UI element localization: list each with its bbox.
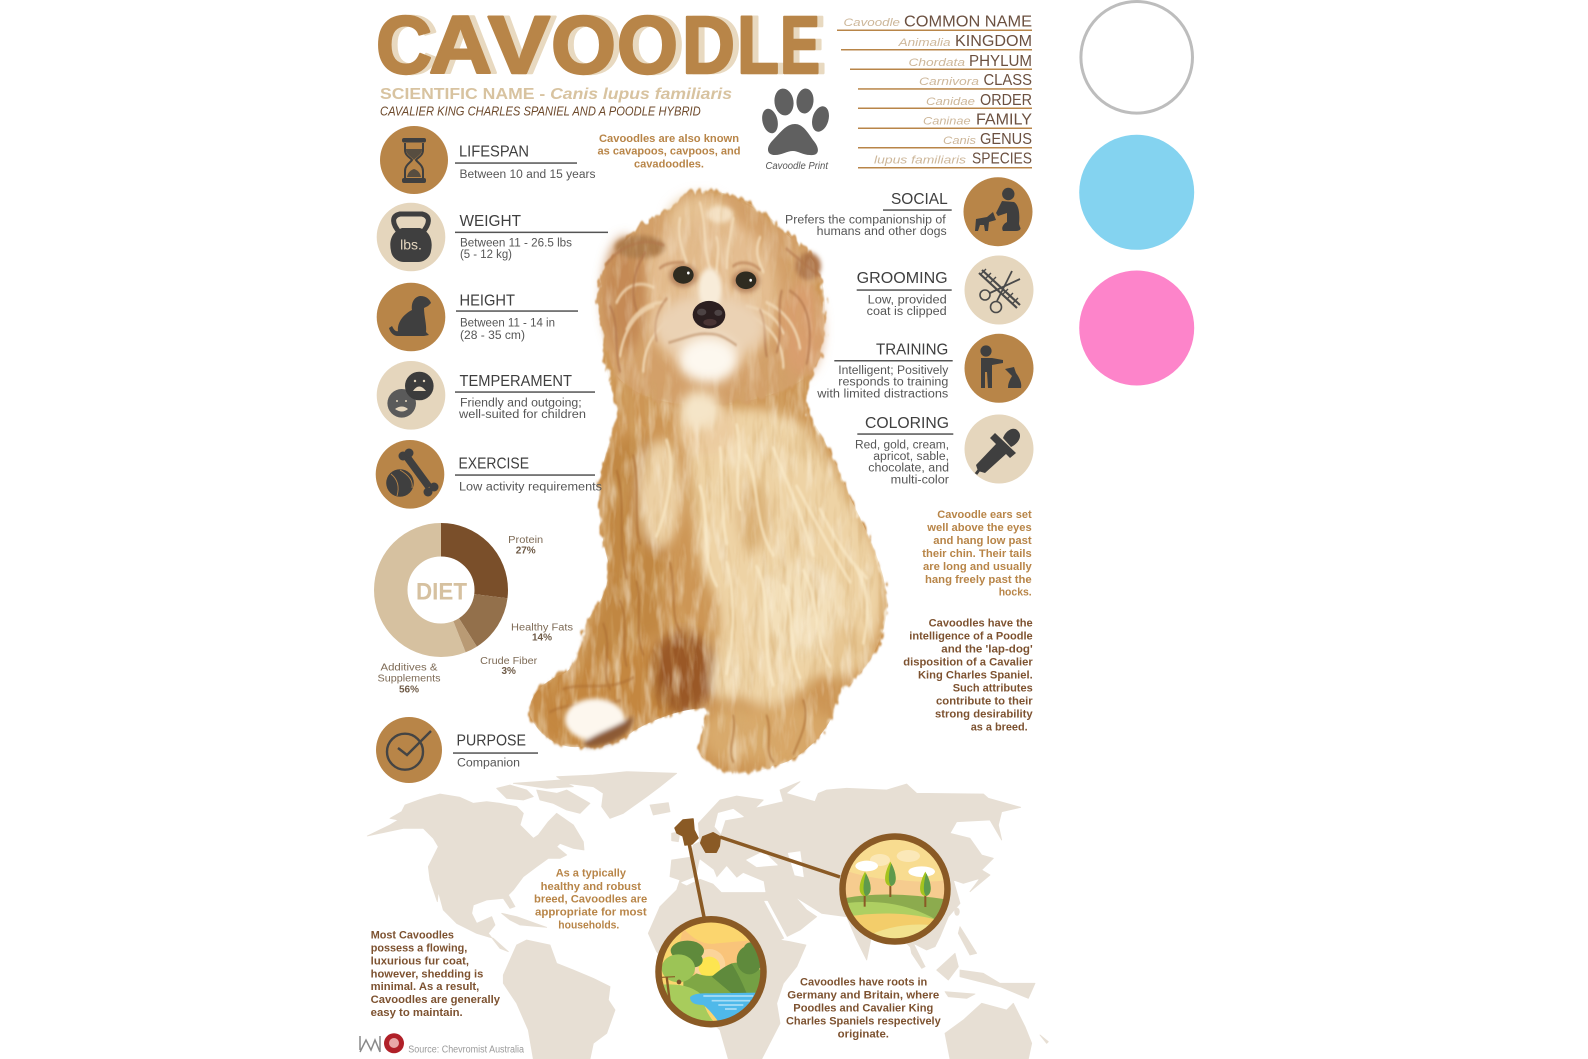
text block: roots: Germany and Britain, where (787, 990, 939, 1002)
text block: healthy breed: healthy and robust (541, 881, 641, 893)
diet labels: 27% (516, 546, 536, 557)
text block: healthy breed: breed, Cavoodles are (534, 894, 647, 906)
panel: coloring: COLORING (865, 415, 949, 432)
text block: roots: Cavoodles have roots in (800, 977, 928, 989)
logo: red seal (384, 1033, 404, 1053)
scientific name: SCIENTIFIC NAME - Canis lupus familiaris (380, 86, 732, 103)
title (376, 0, 826, 91)
text block: roots: Poodles and Cavalier King (793, 1003, 933, 1015)
head fur strokes (617, 203, 800, 371)
text block: ears and tails: and hang low past (933, 535, 1032, 547)
panel: exercise: Low activity requirements (459, 482, 602, 494)
panel: temperament: TEMPERAMENT (460, 373, 572, 390)
marker: Germany (701, 833, 720, 852)
panel: weight: Between 11 - 26.5 lbs (460, 238, 572, 250)
panel: grooming: Low, provided (868, 294, 947, 306)
text block: intelligence (903, 618, 1034, 733)
icon: eyedropper (964, 414, 1034, 484)
eyes (669, 264, 697, 287)
diet labels: Healthy Fats (511, 623, 573, 634)
icon: trainer and dog (964, 334, 1034, 403)
title main: C (376, 0, 432, 91)
text block: healthy breed: appropriate for most (535, 907, 647, 919)
title shadow: C (382, 0, 438, 91)
icon: faces (377, 361, 445, 430)
text block: coat: Cavoodles are generally (371, 994, 501, 1006)
panel: coloring: Red, gold, cream, (855, 439, 949, 451)
panel: purpose: PURPOSE (456, 732, 526, 750)
arrow: Germany to landscape (720, 837, 840, 877)
taxonomy list: KINGDOM (955, 33, 1032, 50)
text block: ears and tails (922, 509, 1033, 599)
tail tip (565, 699, 633, 747)
title shadow: A (435, 0, 498, 91)
landscape: lake circle (657, 917, 767, 1027)
text block: roots (786, 977, 942, 1041)
panel: grooming (857, 256, 1034, 324)
callout: also known as: as cavapoos, cavpoos, and (598, 146, 740, 158)
title shadow: V (494, 0, 556, 91)
diet labels: 14% (532, 633, 552, 644)
text block: healthy breed (534, 868, 647, 931)
panel: training: with limited distractions (816, 388, 949, 400)
map: Eurasia, Africa and Oceania (648, 782, 1048, 1059)
text block: ears and tails: their chin. Their tails (922, 548, 1032, 560)
text block: coat: luxurious fur coat, (371, 955, 469, 967)
diet labels: Crude Fiber (480, 656, 538, 667)
taxonomy list: Cavoodle (844, 17, 900, 29)
text block: ears and tails: are long and usually (923, 561, 1033, 573)
map: Americas and Greenland (367, 772, 680, 1059)
taxonomy list: SPECIES (972, 150, 1032, 168)
taxonomy list: Animalia (897, 37, 951, 49)
fur strokes (657, 425, 867, 685)
icon: hourglass (380, 126, 448, 194)
panel: temperament (377, 361, 595, 430)
panel: height: Between 11 - 14 in (460, 318, 555, 330)
source credit: Source: Chevromist Australia (408, 1045, 524, 1056)
taxonomy list: Canidae (926, 96, 975, 108)
taxonomy list: FAMILY (976, 112, 1032, 128)
taxonomy list: GENUS (980, 131, 1032, 148)
callout: also known as (598, 133, 740, 170)
text block: intelligence: Such attributes (953, 683, 1033, 695)
panel: lifespan: LIFESPAN (459, 144, 529, 160)
panel: exercise: EXERCISE (458, 456, 529, 472)
title shadow: E (786, 0, 826, 91)
callout: also known as: Cavoodles are also known (599, 133, 739, 145)
panel: exercise (376, 440, 602, 509)
text block: ears and tails: hang freely past the (925, 574, 1032, 586)
taxonomy list (837, 14, 1032, 168)
swatch circles (1079, 2, 1194, 386)
taxonomy list: Canis (943, 135, 977, 147)
icon: comb and scissors (964, 256, 1034, 324)
icon: paw print (760, 87, 832, 155)
panel: weight: WEIGHT (460, 213, 522, 230)
paw caption: Cavoodle Print (766, 161, 829, 172)
text block: coat: easy to maintain. (371, 1007, 463, 1019)
taxonomy list: Chordata (908, 57, 965, 69)
arrow: Britain to landscape (689, 843, 704, 917)
head texture (605, 195, 825, 404)
diet labels: Protein (508, 535, 543, 546)
taxonomy list: Carnivora (919, 76, 979, 88)
world map (367, 772, 1048, 1059)
head (587, 180, 840, 429)
diet labels: 3% (501, 666, 516, 677)
title main: V (488, 0, 550, 91)
panel: training (816, 334, 1034, 403)
taxonomy list: ORDER (980, 92, 1032, 109)
icon: kettlebell: lbs. (400, 236, 422, 252)
panel: social (785, 177, 1032, 246)
icon: person with dog (964, 177, 1032, 246)
title main: O (617, 0, 678, 91)
marker: Britain (675, 819, 698, 845)
left body shadow (583, 435, 669, 674)
icon: check mark (376, 717, 442, 783)
title main: A (429, 0, 492, 91)
text block: ears and tails: well above the eyes (926, 522, 1032, 534)
text block: intelligence: contribute to their (936, 695, 1033, 707)
diet labels: 56% (399, 684, 419, 695)
nose (693, 301, 725, 328)
text block: coat: minimal. As a result, (371, 981, 479, 993)
title main: E (780, 0, 820, 91)
diet labels: Supplements (378, 674, 440, 685)
panel: training: TRAINING (876, 342, 948, 358)
panel: social: humans and other dogs (817, 226, 947, 238)
text block: coat: Most Cavoodles (371, 929, 454, 941)
title shadow: O (557, 0, 622, 91)
taxonomy list: CLASS (984, 72, 1032, 89)
panel: coloring: apricot, sable, (873, 451, 949, 463)
panel: coloring (855, 414, 1034, 486)
dog: fur body (520, 180, 890, 780)
landscape: savanna circle (840, 833, 950, 947)
title main: D (682, 0, 735, 91)
panel: purpose: Companion (457, 758, 520, 770)
title main: L (737, 0, 779, 91)
panel: temperament: Friendly and outgoing; (460, 398, 582, 410)
icon: kettlebell (377, 203, 445, 271)
text block: intelligence: Cavoodles have the (929, 618, 1033, 630)
text block: intelligence: disposition of a Cavalier (903, 657, 1033, 669)
title main: O (551, 0, 616, 91)
icon: bone and ball (376, 440, 444, 509)
panel: lifespan: Between 10 and 15 years (460, 169, 596, 181)
text block: coat: however, shedding is (371, 968, 483, 980)
text block: intelligence: King Charles Spaniel. (918, 670, 1033, 682)
taxonomy list: Caninae (923, 116, 971, 128)
text block: ears and tails: Cavoodle ears set (937, 509, 1032, 521)
panel: training: responds to training (838, 377, 948, 389)
panel: grooming: GROOMING (857, 270, 948, 287)
diet labels (378, 535, 573, 695)
panel: social: Prefers the companionship of (785, 214, 947, 226)
text block: healthy breed: As a typically (556, 868, 627, 880)
text block: ears and tails: hocks. (999, 587, 1032, 599)
panel: training: Intelligent; Positively (838, 365, 949, 377)
text block: roots: originate. (838, 1029, 889, 1041)
panel: purpose (376, 717, 538, 783)
dog illustration (520, 180, 890, 780)
panel: weight (377, 203, 608, 271)
text block: intelligence: and the 'lap-dog' (941, 644, 1033, 656)
title shadow: D (688, 0, 741, 91)
text block: healthy breed: households. (558, 919, 619, 931)
taxonomy list: COMMON NAME (904, 14, 1032, 30)
callout: also known as: cavadoodles. (634, 158, 704, 170)
text block: roots: Charles Spaniels respectively (786, 1015, 942, 1027)
hybrid subtitle: CAVALIER KING CHARLES SPANIEL AND A POODLE HYBRID (380, 105, 701, 119)
text block: coat: possess a flowing, (371, 942, 467, 954)
panel: coloring: multi-color (891, 474, 949, 486)
text block: intelligence: intelligence of a Poodle (909, 630, 1033, 642)
title shadow: O (623, 0, 684, 91)
panel: weight: (5 - 12 kg) (460, 249, 512, 261)
chart: diet donut: DIET (416, 578, 467, 605)
map markers: Britain and Germany with connectors (675, 819, 840, 917)
panel: social: SOCIAL (891, 191, 948, 208)
title shadow: L (743, 0, 785, 91)
muzzle (655, 295, 765, 360)
panel: height (377, 283, 578, 351)
diet labels: Additives & (380, 663, 438, 674)
text block: intelligence: as a breed. (971, 721, 1028, 733)
chart: diet donut (378, 535, 573, 695)
fur texture streaks (520, 180, 890, 780)
panel: temperament: well-suited for children (458, 409, 586, 421)
title shadow (382, 0, 826, 91)
panel: lifespan (380, 126, 596, 194)
mouth (668, 334, 737, 345)
panel: height: HEIGHT (460, 292, 515, 310)
footer logos and source (360, 1033, 524, 1056)
taxonomy list: PHYLUM (969, 53, 1032, 70)
logo: W mark (360, 1036, 380, 1052)
title main (376, 0, 820, 91)
panel: height: (28 - 35 cm) (460, 330, 525, 342)
taxonomy list: lupus familiaris (874, 154, 967, 166)
icon: sitting dog (377, 283, 445, 351)
text block: coat (371, 929, 501, 1019)
text block: intelligence: strong desirability (935, 708, 1034, 720)
panel: coloring: chocolate, and (868, 463, 949, 475)
panel: grooming: coat is clipped (867, 306, 947, 318)
